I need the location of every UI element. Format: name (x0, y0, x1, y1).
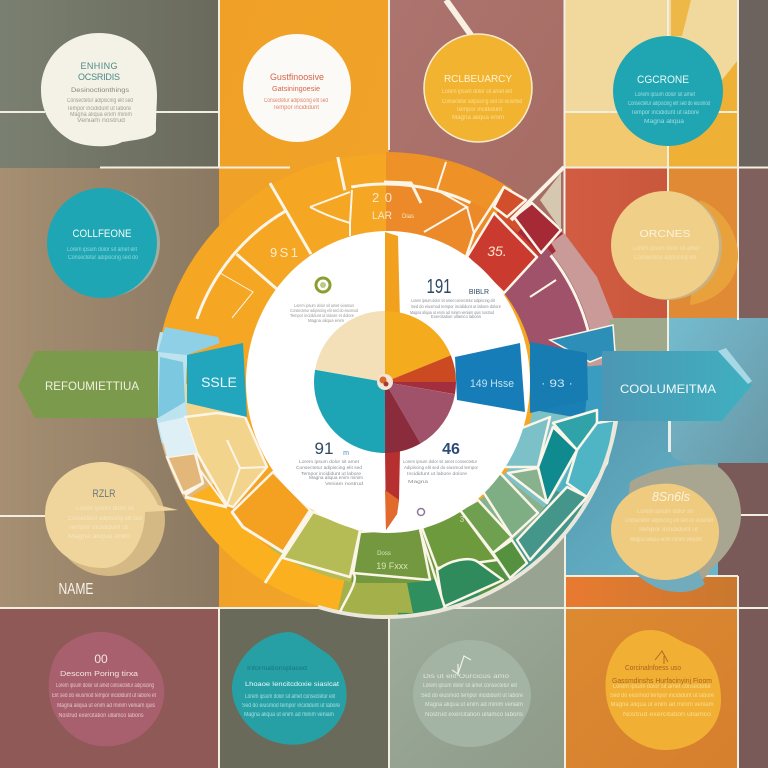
text: Nostrud exercitation ullamco laboris (425, 712, 523, 718)
text block: lower right disc: Lorem ipsum dolor sit amet consectetur (403, 459, 477, 464)
text: Consectetur adipiscing sed do eiusmod (442, 99, 522, 105)
text block: upper right disc: Magna aliqua ut enim ad minim veniam quis nostrud (410, 310, 494, 315)
inner ring segments (132, 130, 640, 638)
panel: top-third note (424, 34, 532, 142)
number: 191: 191 (426, 276, 452, 298)
text block: lower left disc: Veniam nostrud (325, 481, 364, 486)
text: Consectetur adipiscing elit sed (68, 516, 142, 522)
text: Sed do eiusmod tempor incididunt ut labore (610, 693, 715, 699)
text: Magna aliqua enim minim veniam (630, 537, 702, 543)
text (242, 694, 341, 718)
text (633, 246, 699, 261)
beige triangle (540, 173, 561, 230)
number: 20 LAR: Dias (402, 214, 414, 220)
text: Magna aliqua enim minim (70, 112, 132, 118)
label: SSLE: SSLE (201, 374, 237, 390)
text block: lower left disc (296, 459, 364, 486)
number: bottom green (376, 551, 408, 571)
text block: upper left disc: Lorem ipsum dolor sit amet vivamus (294, 303, 355, 308)
icon: small chart line (655, 651, 668, 664)
text: Tempor incididunt ut (638, 527, 698, 533)
number: 191 (426, 276, 489, 298)
heading (612, 665, 712, 685)
panel: top-right teal note (613, 36, 723, 146)
top white connector (446, 0, 471, 35)
wheel numbers (270, 190, 507, 571)
heading: Descom Poring tirxa (60, 671, 138, 678)
pie chart (337, 334, 433, 430)
number: 46: 46 (442, 441, 460, 458)
number: 91 (315, 439, 349, 458)
text: Consectetur adipiscing elit sed do eiusmod (625, 518, 713, 524)
text block: lower left disc: Lorem ipsum dolor sit amet (299, 459, 360, 464)
panel: lower-left speech bubble (45, 462, 178, 576)
label: 93: · 93 · (541, 378, 573, 390)
text block: upper right disc (410, 298, 501, 319)
text: Consectetur adipiscing elit (634, 255, 696, 261)
text: Lorem ipsum dolor sit amet elit (67, 247, 137, 253)
text (67, 247, 139, 261)
text: Consectetur adipiscing sed do (68, 255, 139, 261)
text (421, 683, 524, 718)
text block: upper right disc: Exercitation ullamco laboris (431, 314, 482, 319)
text: Tempor incididunt ut (68, 525, 128, 531)
text: Tempor incididunt ut labore (631, 110, 700, 116)
panel: top-left note (41, 33, 157, 146)
text (610, 684, 715, 718)
heading (270, 72, 324, 93)
text: Magna aliqua ut enim ad minim veniam quis (57, 703, 155, 709)
icon: small chart line (452, 656, 471, 676)
text: Nostrud exercitation ullamco (623, 712, 712, 718)
icon: purple ring (418, 508, 424, 516)
left green arrow (18, 351, 158, 418)
heading: Informationsplaced (247, 665, 307, 672)
label: NAME: NAME (58, 581, 94, 598)
text block: upper left disc: Consectetur adipiscing elit sed do eiusmod (290, 308, 358, 313)
vertical red bar (385, 450, 400, 530)
text: Consectetur adipiscing elit sed (264, 98, 328, 104)
heading: Gatsiningoesie (272, 86, 320, 93)
text: Sed do eiusmod tempor incididunt ut labore (242, 703, 341, 709)
text block: lower right disc (403, 459, 478, 484)
text: Sed do eiusmod tempor incididunt ut labore (421, 693, 524, 699)
text block: lower right disc: Adipiscing elit sed do eiusmod tempor (404, 465, 478, 470)
number: 951: 9S1 (270, 245, 298, 260)
text: Magna aliqua ut enim ad minim veniam (610, 702, 714, 708)
panel: left teal note (47, 188, 160, 298)
text (52, 683, 156, 719)
heading (60, 652, 138, 678)
outer ring base (156, 154, 616, 614)
white diagonal connector (511, 167, 564, 220)
label: REFOUMIETTIUA (45, 379, 139, 393)
text (68, 506, 142, 540)
red bar tip (385, 490, 399, 530)
text (442, 89, 522, 121)
text: Consectetur adipiscing elit sed (67, 98, 133, 104)
text (625, 509, 713, 543)
text block: lower right disc: Incididunt ut labore dolore (407, 471, 468, 476)
heading: ORCNES (640, 229, 691, 240)
panel: top-center note (243, 34, 351, 142)
text: Lorem ipsum dolor sit (637, 509, 693, 515)
text: Tempor incididunt (273, 105, 319, 111)
label: 149: 149 Hsse (470, 378, 514, 390)
vertical orange bar (385, 232, 400, 320)
text: Lorem ipsum dolor sit amet consectetur elit (245, 694, 335, 700)
panel: bottom sage note (413, 640, 531, 747)
text: Lorem ipsum dolor sit amet elit (442, 89, 512, 95)
heading: COLLFEONE (72, 228, 132, 240)
number: 91: m (343, 450, 349, 457)
label: COOLUMEITMA (620, 382, 716, 396)
number: bottom green: Doss (377, 551, 391, 557)
number: 91: 91 (315, 439, 333, 458)
heading: CGCRONE (637, 74, 689, 86)
text block: lower right disc: Magna (408, 479, 429, 484)
panel: right cream note (611, 191, 738, 305)
outer ring segments (81, 79, 691, 689)
text block: lower left disc: Magna aliqua enim minim (309, 475, 363, 480)
text (628, 92, 710, 125)
text: Lorem ipsum dolor sit amet consectetur (613, 684, 711, 690)
icon: green ring (316, 278, 330, 292)
text: Lorem ipsum dolor sit amet consectetur adipiscing (56, 683, 154, 689)
number: 20 LAR: 20 (372, 190, 392, 205)
heading: Dis ut elit Ourcicus amo (423, 674, 510, 680)
text (264, 98, 328, 111)
text: Tempor incididunt ut labore (67, 106, 132, 112)
number: 191: BIBLR (469, 289, 489, 296)
heading: RCLBEUARCY (444, 74, 512, 85)
text (67, 87, 133, 124)
number: 20 LAR: LAR (372, 210, 392, 222)
teal left box and light blue tabs (158, 327, 247, 457)
heading: ENHING (80, 61, 118, 71)
text: Lorem ipsum dolor sit amet (635, 92, 695, 98)
text: Lorem ipsum dolor sit amet consectetur elit (423, 683, 517, 689)
text block: upper left disc (290, 303, 358, 323)
heading: 00 (94, 652, 108, 666)
panel: bottom orange note (605, 630, 721, 750)
number: 20 LAR (372, 190, 414, 222)
text: Consectetur adipiscing elit sed do eiusmod (628, 101, 710, 107)
heading (245, 665, 339, 688)
text: Magna aliqua (644, 119, 685, 125)
panel: lower-right note (611, 464, 741, 592)
blue right boxes (455, 325, 615, 413)
text: Lorem ipsum dolor sit (76, 506, 134, 512)
heading: Corcinalnfoess uso (625, 665, 681, 672)
text: Elit sed do eiusmod tempor incididunt ut labore et (52, 693, 156, 699)
text block: upper left disc: Magna aliqua enim (308, 318, 344, 323)
text: Lorem ipsum dolor sit amet (633, 246, 699, 252)
pale pink band (551, 233, 614, 320)
text: Nostrud exercitation ullamco laboris (58, 713, 144, 719)
heading (78, 61, 120, 82)
text: Magna aliqua enim (68, 534, 130, 540)
heading: Gassmdinshs Hurfacinyinj Fioom (612, 676, 712, 685)
panel: bottom teal note (232, 632, 347, 745)
text: Magna aliqua enim (452, 115, 504, 121)
heading: OCSRIDIS (78, 72, 120, 82)
number: small green: 3 (460, 515, 465, 524)
text block: upper left disc: Tempor incididunt ut labore et dolore (290, 313, 354, 318)
rim and ring dividers (93, 91, 679, 677)
inner white disc (246, 231, 530, 533)
text: Magna aliqua ut enim ad minim veniam (425, 702, 523, 708)
heading: RZLR (92, 488, 116, 500)
panel: bottom mauve note (49, 632, 164, 746)
text block: upper right disc: Sed do eiusmod tempor incididunt ut labore dolore (411, 304, 501, 309)
text: Tempor incididunt (456, 107, 502, 113)
number: bottom green: 19 Fxxx (376, 561, 408, 571)
right blue arrow (602, 348, 752, 452)
text block: lower left disc: Consectetur adipiscing elit sed (296, 465, 363, 470)
lower and right ring tiles (167, 187, 615, 613)
text: Magna aliqua ut enim ad minim veniam (244, 712, 334, 718)
text block: upper right disc: Lorem ipsum dolor sit amet consectetur adipiscing elit (411, 298, 496, 303)
text: Desinoctionthings (71, 87, 130, 94)
heading: 8Sn6ls (652, 489, 690, 504)
heading: Lhoaoe Iencitcdoxie siaslcat (245, 681, 339, 688)
number: 35: 35. (487, 243, 507, 259)
text block: lower left disc: Tempor incididunt ut labore (301, 471, 362, 476)
text: Veniam nostrud (77, 118, 125, 124)
pie centre ornament (377, 374, 393, 390)
heading: Gustfinoosive (270, 72, 324, 82)
